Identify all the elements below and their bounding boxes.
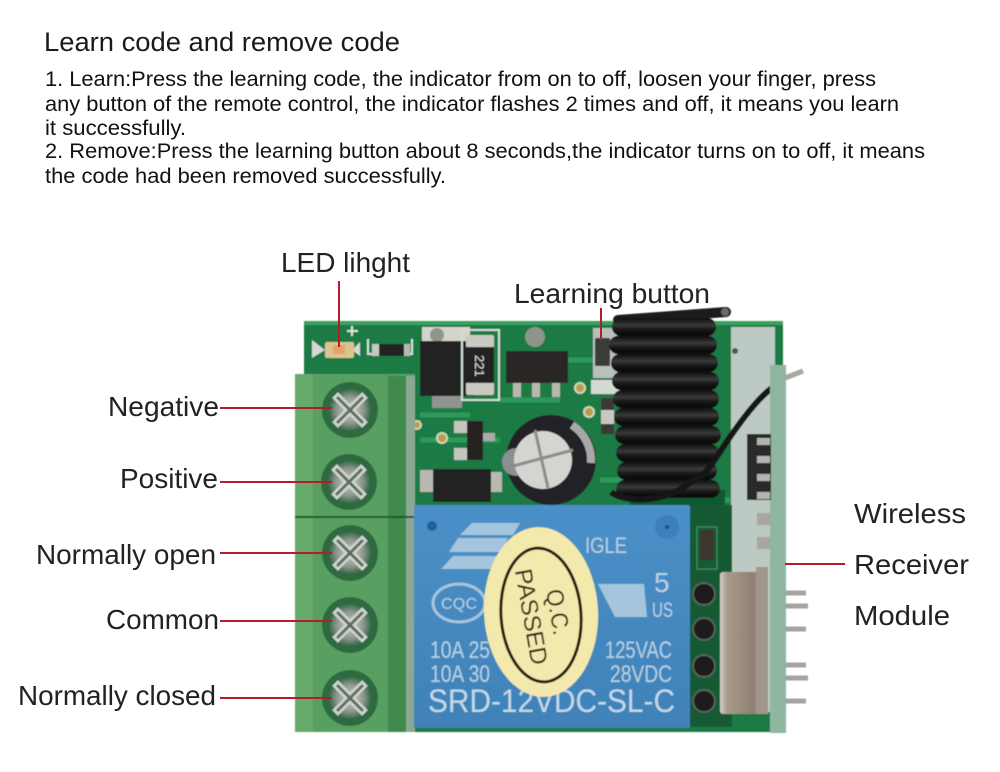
vias — [413, 383, 594, 443]
callout: Wireless Receiver Module — [785, 498, 969, 631]
instructions text block: it successfully. — [45, 116, 186, 140]
resistor 221: 221 — [472, 355, 487, 377]
callout: Wireless Receiver Module: Module — [854, 600, 950, 631]
instructions text block — [45, 67, 925, 188]
relay: SRD-12VDC-SL-C — [428, 683, 675, 719]
main PCB — [304, 321, 783, 732]
small transistor — [454, 421, 495, 460]
screws — [321, 382, 378, 726]
regulator — [506, 327, 568, 397]
callout: LED lihght — [281, 247, 410, 347]
relay: CQC — [441, 596, 477, 613]
callout: Learning button: Learning button — [514, 278, 710, 309]
relay: 28VDC — [610, 661, 672, 688]
relay: 10A 25 — [430, 637, 490, 664]
LED and resistor — [312, 326, 412, 358]
relay: 125VAC — [605, 637, 672, 664]
learning button — [591, 328, 621, 394]
screw terminal block — [295, 374, 415, 732]
callout: Wireless Receiver Module: Wireless — [854, 498, 966, 529]
QC passed sticker: PASSED — [509, 567, 552, 667]
small resistor — [601, 398, 614, 434]
module pins — [785, 593, 808, 701]
callout: LED lihght: LED lihght — [281, 247, 410, 278]
crystal and pads — [693, 527, 768, 714]
QC passed sticker — [480, 524, 602, 700]
relay: US — [652, 599, 673, 622]
callout: Negative: Negative — [108, 391, 219, 422]
diode lower — [420, 469, 502, 502]
capacitor — [502, 415, 596, 505]
CQC mark — [433, 584, 485, 622]
callout: Common: Common — [106, 604, 219, 635]
receiver board edge — [770, 365, 786, 733]
diode top — [420, 327, 474, 408]
instructions text block: 1. Learn:Press the learning code, the indicator from on to off, loosen your finger, press — [45, 67, 876, 91]
relay: 10A 30 — [430, 661, 490, 688]
instructions text block: the code had been removed successfully. — [45, 164, 446, 188]
instructions text block: any button of the remote control, the indicator flashes 2 times and off, it means you learn — [45, 92, 899, 116]
callout: Normally closed: Normally closed — [18, 680, 216, 711]
antenna coil — [609, 308, 772, 499]
relay: 5 — [654, 567, 670, 598]
QC passed sticker: Q.C. — [540, 587, 575, 637]
title: Learn code and remove code — [44, 27, 400, 57]
relay: IGLE — [585, 533, 627, 558]
relay — [414, 505, 690, 728]
relay logo stripes — [441, 523, 520, 569]
traces — [420, 360, 730, 500]
callout: Normally open: Normally open — [36, 539, 216, 570]
resistor 221 — [462, 330, 499, 400]
callout: Positive: Positive — [120, 463, 218, 494]
instructions text block: 2. Remove:Press the learning button about 8 seconds,the indicator turns on to off, it means — [45, 139, 925, 163]
receiver chip — [747, 434, 771, 500]
silver pads — [757, 513, 770, 549]
callout: Wireless Receiver Module: Receiver — [854, 549, 969, 580]
silver ground area — [731, 327, 775, 712]
receiver module board — [295, 308, 808, 733]
